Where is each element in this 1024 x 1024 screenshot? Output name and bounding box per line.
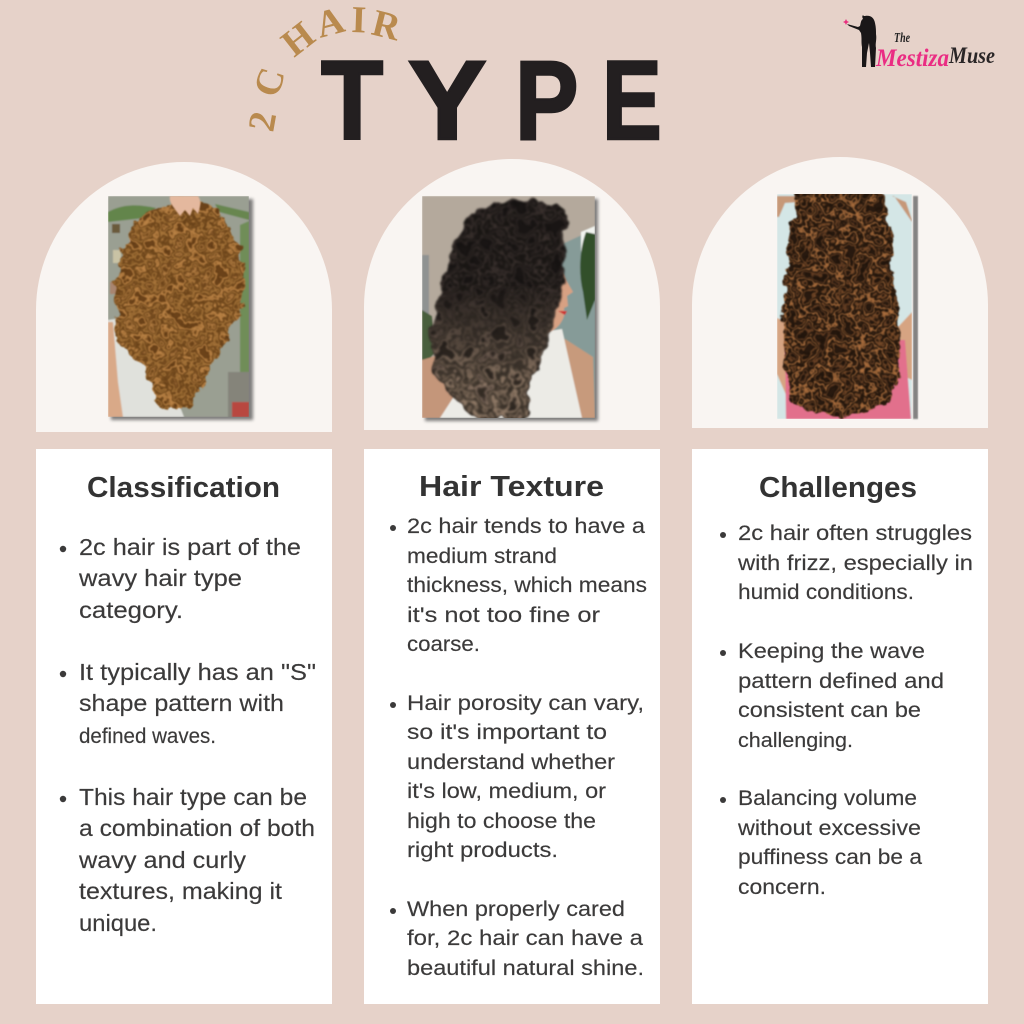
title: TYPE: Y [408, 39, 486, 163]
photo: long curly brown hair from behind [777, 190, 918, 419]
bullet list: consistent can be [738, 698, 921, 722]
bullet list: 2c hair often struggles [738, 521, 972, 545]
title: TYPE: E [602, 39, 662, 163]
bullet list: so it's important to [407, 720, 607, 744]
bullet list: understand whether [407, 750, 615, 774]
panel: challenges [692, 449, 988, 1004]
bullet list: 2c hair is part of the [79, 534, 301, 560]
bullet list: concern. [738, 875, 826, 899]
bullet list: When properly cared [407, 897, 625, 921]
logo: The Mestiza Muse: Muse [948, 43, 995, 68]
bullet list: textures, making it [79, 878, 283, 904]
title: TYPE [321, 38, 662, 164]
bullet list: Hair porosity can vary, [407, 691, 644, 715]
heading: Classification [87, 472, 280, 504]
heading: Hair Texture [419, 471, 604, 503]
bullet list: thickness, which means [407, 573, 647, 597]
panel: classification [36, 449, 332, 1004]
bullet list: it's low, medium, or [407, 779, 606, 803]
bullet list: with frizz, especially in [737, 551, 973, 575]
bullet list: pattern defined and [738, 669, 944, 693]
title: 2C HAIR arched: A [311, 0, 349, 47]
bullet list: It typically has an "S" [79, 659, 316, 685]
panel: hair texture [364, 449, 660, 1004]
logo: The Mestiza Muse: The [894, 31, 910, 46]
bullet list [720, 521, 973, 899]
bullet list: humid conditions. [738, 580, 914, 604]
bullet list: Keeping the wave [738, 639, 925, 663]
bullet list: puffiness can be a [738, 845, 922, 869]
bullet list: coarse. [407, 632, 480, 656]
bullet list: defined waves. [79, 724, 216, 748]
icon: silhouette figure [847, 15, 876, 67]
bullet list: Balancing volume [738, 786, 917, 810]
bullet list: it's not too fine or [407, 603, 600, 627]
bullet list: unique. [79, 910, 157, 936]
title: 2C HAIR arched [241, 0, 405, 135]
title: 2C HAIR arched: R [368, 2, 405, 50]
title: 2C HAIR arched: I [351, 0, 367, 42]
bullet list [390, 514, 647, 980]
bullet list: without excessive [737, 816, 921, 840]
title: 2C HAIR arched: H [274, 14, 323, 65]
title: 2C HAIR arched: 2 [241, 109, 285, 135]
panel: hair texture arch [364, 159, 660, 430]
bullet list: wavy and curly [78, 847, 247, 873]
title: TYPE: T [321, 38, 383, 163]
heading: Challenges [759, 472, 917, 504]
photo: dark balayage hair in profile [422, 196, 598, 421]
bullet list: This hair type can be [79, 784, 307, 810]
bullet list: wavy hair type [78, 565, 242, 591]
title: 2C HAIR arched: C [246, 63, 294, 102]
logo: The Mestiza Muse: Mestiza [875, 45, 949, 72]
title: TYPE: P [515, 39, 578, 164]
bullet list: right products. [407, 838, 558, 862]
bullet list: for, 2c hair can have a [407, 926, 643, 950]
bullet list: category. [79, 597, 183, 623]
bullet list: shape pattern with [79, 690, 284, 716]
bullet list: beautiful natural shine. [407, 956, 644, 980]
logo: The Mestiza Muse [843, 15, 995, 72]
panel: classification arch [36, 162, 332, 432]
photo: curly golden hair [108, 196, 253, 420]
panel: challenges arch [692, 157, 988, 428]
bullet list: 2c hair tends to have a [407, 514, 645, 538]
bullet list: medium strand [407, 544, 557, 568]
bullet list [60, 534, 316, 936]
bullet list: challenging. [738, 730, 853, 752]
bullet list: a combination of both [79, 815, 315, 841]
icon: pink star [843, 19, 849, 25]
bullet list: high to choose the [407, 809, 596, 833]
